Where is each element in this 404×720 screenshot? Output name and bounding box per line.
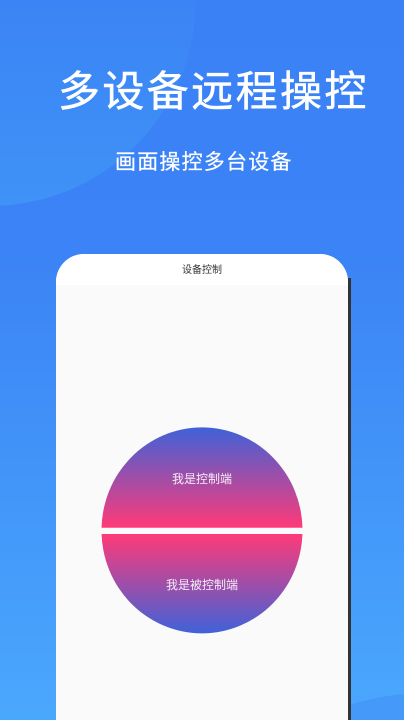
role selector circle: [102, 427, 302, 634]
subtitle: 画面操控多台设备: [115, 151, 293, 174]
phone right edge: [348, 278, 350, 720]
lower half: controlled: [102, 534, 302, 634]
header label: 设备控制: [182, 265, 222, 276]
lower half: controlled: 我是被控制端: [166, 578, 238, 592]
title: 多设备远程操控: [58, 68, 369, 115]
phone frame: [56, 254, 348, 720]
upper half: controller: [102, 427, 302, 528]
phone header bar: [56, 254, 348, 285]
upper half: controller: 我是控制端: [172, 472, 232, 486]
